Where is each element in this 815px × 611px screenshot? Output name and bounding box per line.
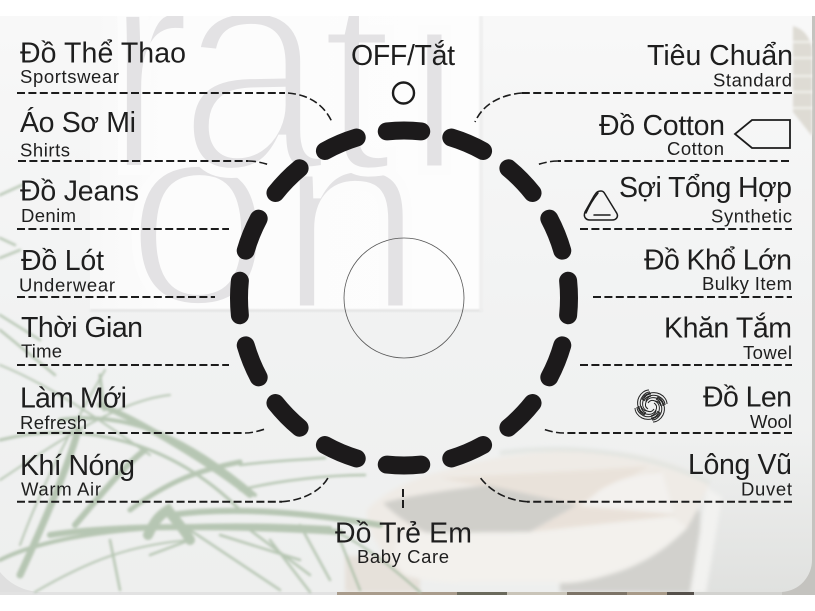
icon: synthetic triangle bbox=[584, 191, 617, 220]
label: Cotton: Cotton bbox=[667, 138, 724, 159]
label: Synthetic: Synthetic bbox=[711, 206, 792, 226]
label: Towel: Towel bbox=[743, 342, 792, 363]
label: Shirts bbox=[18, 107, 270, 165]
OFF label and power symbol: OFF/Tắt bbox=[351, 40, 455, 72]
label: Wool bbox=[543, 382, 792, 433]
label: Duvet: Lông Vũ bbox=[688, 449, 792, 481]
selector dial ring of sixteen dashes bbox=[239, 130, 569, 466]
label: Time: Time bbox=[21, 340, 62, 362]
OFF label and power symbol bbox=[351, 40, 455, 104]
wall art canvas: n bbox=[277, 71, 424, 367]
label: Warm Air: Warm Air bbox=[21, 478, 101, 500]
label: Cotton bbox=[536, 110, 790, 165]
plant leaves bbox=[0, 185, 420, 592]
label: Synthetic bbox=[580, 172, 792, 229]
label: Warm Air bbox=[17, 450, 329, 502]
label: Underwear: Đồ Lót bbox=[21, 245, 104, 277]
center circle bbox=[344, 238, 464, 358]
wall art canvas: o bbox=[125, 66, 272, 362]
label: Refresh: Làm Mới bbox=[20, 382, 127, 414]
label: Denim bbox=[17, 176, 229, 229]
icon: cotton tag bbox=[735, 120, 790, 148]
label: Standard bbox=[475, 40, 793, 122]
icon: wool swirl bbox=[635, 390, 667, 422]
label: Duvet: Duvet bbox=[741, 478, 792, 500]
label: Cotton: Đồ Cotton bbox=[599, 110, 725, 142]
label: Denim: Đồ Jeans bbox=[20, 176, 139, 208]
label: Standard: Standard bbox=[713, 70, 792, 90]
label: Baby Care: Baby Care bbox=[357, 546, 449, 567]
label: Refresh bbox=[17, 382, 265, 433]
label: Duvet bbox=[479, 449, 792, 502]
label: Sportswear: Sportswear bbox=[20, 66, 119, 87]
label: Time: Thời Gian bbox=[21, 312, 143, 344]
label: Bulky Item bbox=[593, 244, 792, 297]
wall art canvas bbox=[122, 16, 478, 308]
label: Towel: Khăn Tắm bbox=[664, 312, 792, 344]
label: Baby Care bbox=[335, 489, 472, 567]
label: Bulky Item: Bulky Item bbox=[702, 273, 792, 294]
chair and pillow bbox=[345, 449, 722, 593]
label: Shirts: Shirts bbox=[20, 140, 70, 160]
label: Bulky Item: Đồ Khổ Lớn bbox=[644, 244, 792, 276]
label: Synthetic: Sợi Tổng Hợp bbox=[619, 172, 792, 204]
label: Baby Care: Đồ Trẻ Em bbox=[335, 518, 472, 550]
label: Towel bbox=[580, 312, 792, 365]
label: Time bbox=[17, 312, 229, 365]
label: Shirts: Áo Sơ Mi bbox=[20, 107, 136, 139]
label: Wool: Đồ Len bbox=[703, 382, 792, 414]
label: Sportswear: Đồ Thể Thao bbox=[20, 38, 186, 70]
shelf at top right bbox=[793, 26, 812, 136]
label: Underwear: Underwear bbox=[19, 274, 115, 296]
label: Refresh: Refresh bbox=[20, 412, 87, 433]
label: Standard: Tiêu Chuẩn bbox=[647, 40, 793, 72]
label: Denim: Denim bbox=[21, 205, 76, 226]
label: Wool: Wool bbox=[750, 411, 792, 432]
bottom edge of photo bbox=[0, 592, 782, 595]
label: Warm Air: Khí Nóng bbox=[20, 450, 135, 482]
label: Sportswear bbox=[17, 38, 332, 122]
label: Underwear bbox=[17, 245, 215, 297]
